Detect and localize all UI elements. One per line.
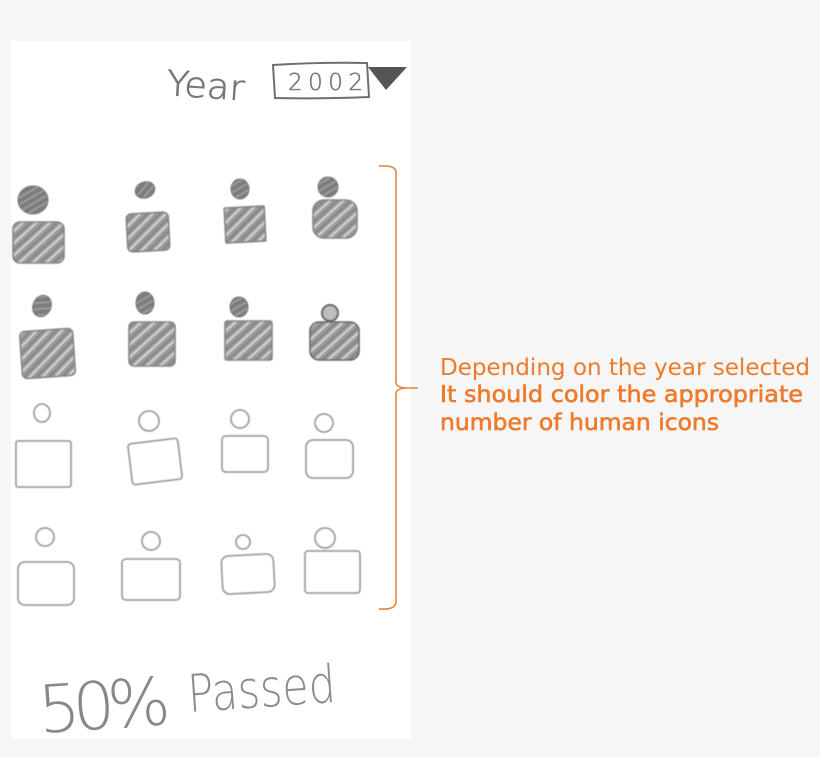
dropdown box — [273, 63, 369, 98]
icon 13 — [18, 528, 74, 605]
icon 16 — [305, 528, 360, 593]
row 3 empty icons — [16, 404, 353, 487]
icon 12 — [306, 414, 353, 478]
icon 10 — [128, 411, 182, 485]
icon 4 — [313, 177, 357, 238]
annotation line 1: Depending on the year selected — [440, 355, 810, 381]
row 4 empty icons — [18, 528, 360, 605]
icon 9 — [16, 404, 71, 487]
dropdown value: 2002 — [288, 70, 363, 96]
icon 3 — [224, 179, 266, 243]
annotation text — [440, 355, 810, 436]
annotation line 2: It should color the appropriate — [440, 382, 803, 408]
sketch panel — [11, 41, 411, 739]
icon 7 — [225, 297, 272, 360]
icon 5 — [19, 292, 76, 379]
percentage: 50% — [36, 663, 173, 749]
label: Year: Year — [165, 64, 247, 109]
row 1 filled icons — [13, 177, 357, 263]
icon 14 — [122, 532, 180, 600]
dropdown arrow — [368, 67, 407, 90]
passed word: Passed — [186, 655, 338, 725]
result label — [36, 655, 338, 749]
icon 8 — [310, 305, 359, 360]
annotation line 3: number of human icons — [440, 410, 719, 436]
icon grid: human icons — [13, 177, 360, 605]
icon 1 — [13, 186, 64, 263]
icon 11 — [222, 410, 268, 472]
orange bracket — [379, 166, 418, 609]
icon 2 — [126, 179, 170, 252]
year selector — [165, 63, 407, 109]
icon 15 — [221, 535, 275, 594]
icon 6 — [129, 292, 175, 366]
row 2 filled icons — [19, 292, 359, 379]
